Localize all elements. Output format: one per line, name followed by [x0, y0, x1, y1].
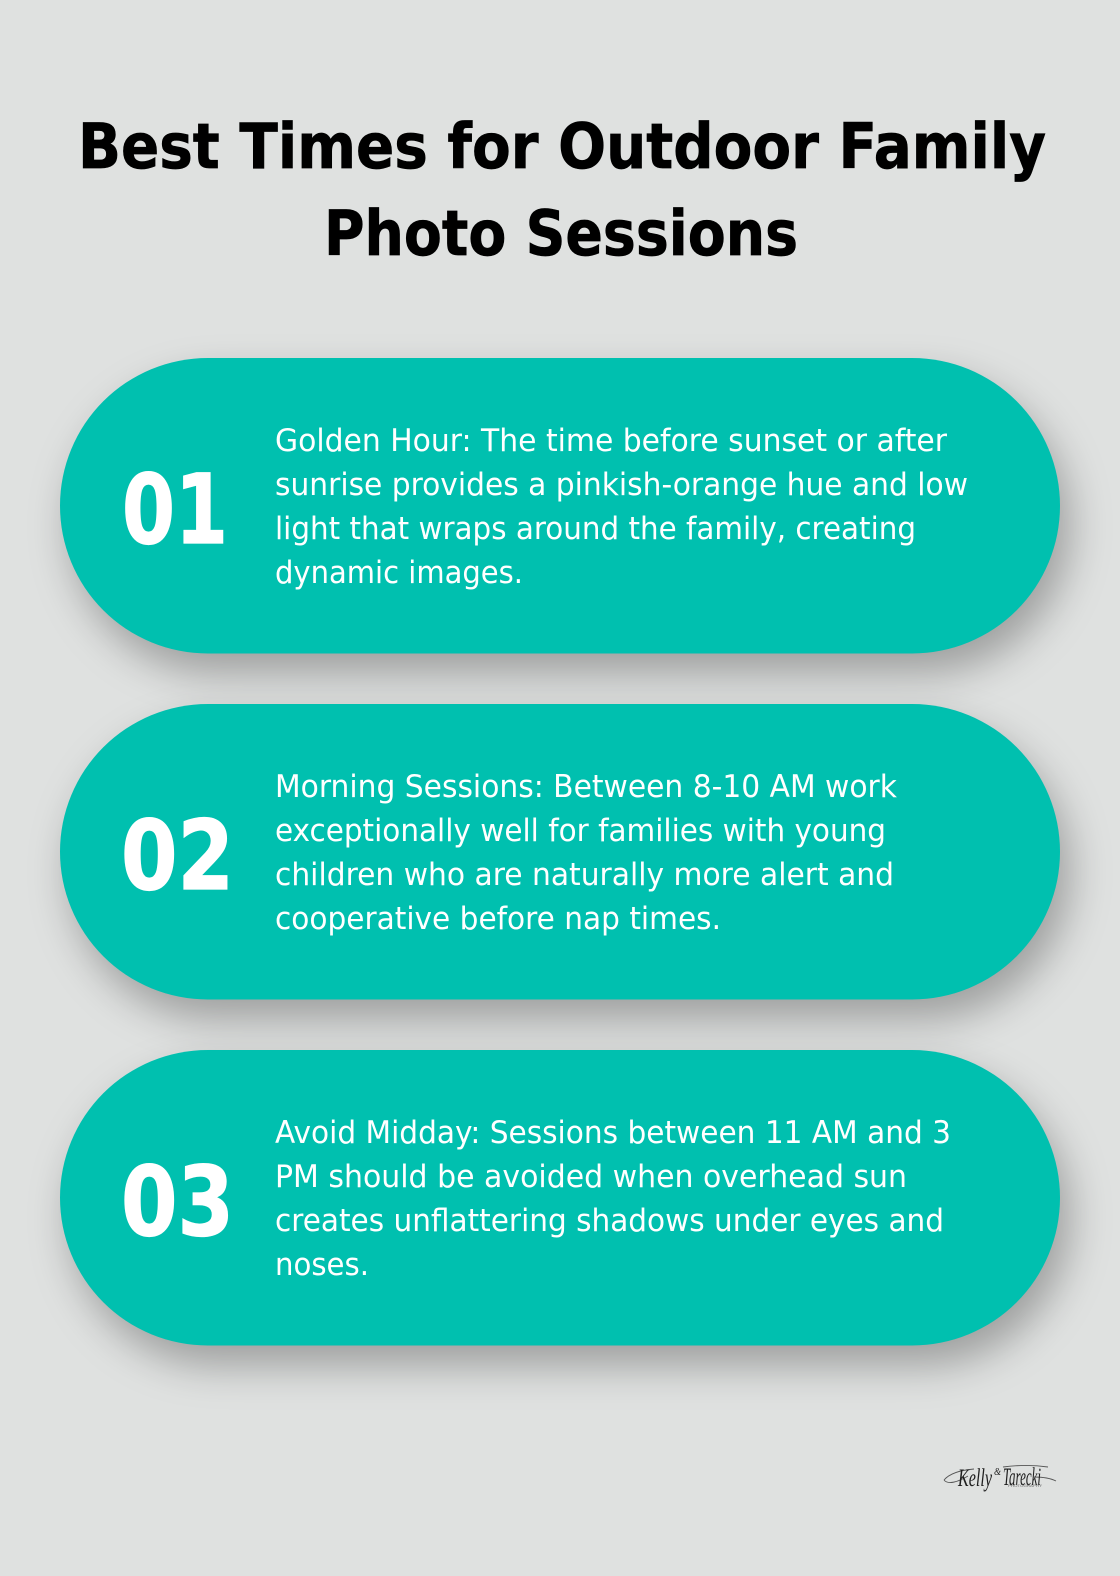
text block: golden hour: dynamic images. [275, 555, 523, 591]
number 02: 02 [121, 800, 234, 912]
text block: avoid midday: creates unflattering shadows under eyes and [275, 1203, 944, 1239]
text block: morning sessions: exceptionally well for families with young [275, 813, 886, 849]
panel: avoid midday [60, 1050, 1060, 1346]
text block: avoid midday: PM should be avoided when overhead sun [275, 1159, 907, 1195]
text block: morning sessions: Morning Sessions: Between 8-10 AM work [275, 769, 897, 805]
text block: morning sessions: children who are naturally more alert and [275, 857, 894, 893]
text block: avoid midday: noses. [275, 1247, 369, 1283]
panel: golden hour [60, 358, 1060, 654]
logo: Kelly & Tarecki Photography signature [944, 1464, 1056, 1492]
text block: golden hour: light that wraps around the family, creating [275, 511, 916, 547]
text block: golden hour: Golden Hour: The time before sunset or after [275, 423, 947, 459]
text block: golden hour [275, 423, 968, 591]
text block: golden hour: sunrise provides a pinkish-orange hue and low [275, 467, 968, 503]
logo: Kelly & Tarecki Photography signature: Tarecki [1003, 1464, 1041, 1491]
text block: avoid midday [275, 1115, 951, 1283]
number 03: 03 [121, 1146, 234, 1258]
logo: Kelly & Tarecki Photography signature: Kelly [957, 1465, 993, 1492]
logo: Kelly & Tarecki Photography signature: PHOTOGRAPHY [1008, 1484, 1043, 1488]
logo: Kelly & Tarecki Photography signature: & [994, 1466, 1001, 1478]
text block: morning sessions [275, 769, 897, 937]
title: Photo Sessions [324, 197, 798, 270]
title [78, 110, 1046, 270]
text block: morning sessions: cooperative before nap times. [275, 901, 721, 937]
number 01: 01 [122, 454, 228, 566]
text block: avoid midday: Avoid Midday: Sessions between 11 AM and 3 [275, 1115, 951, 1151]
panel: morning sessions [60, 704, 1060, 1000]
title: Best Times for Outdoor Family [78, 110, 1046, 183]
